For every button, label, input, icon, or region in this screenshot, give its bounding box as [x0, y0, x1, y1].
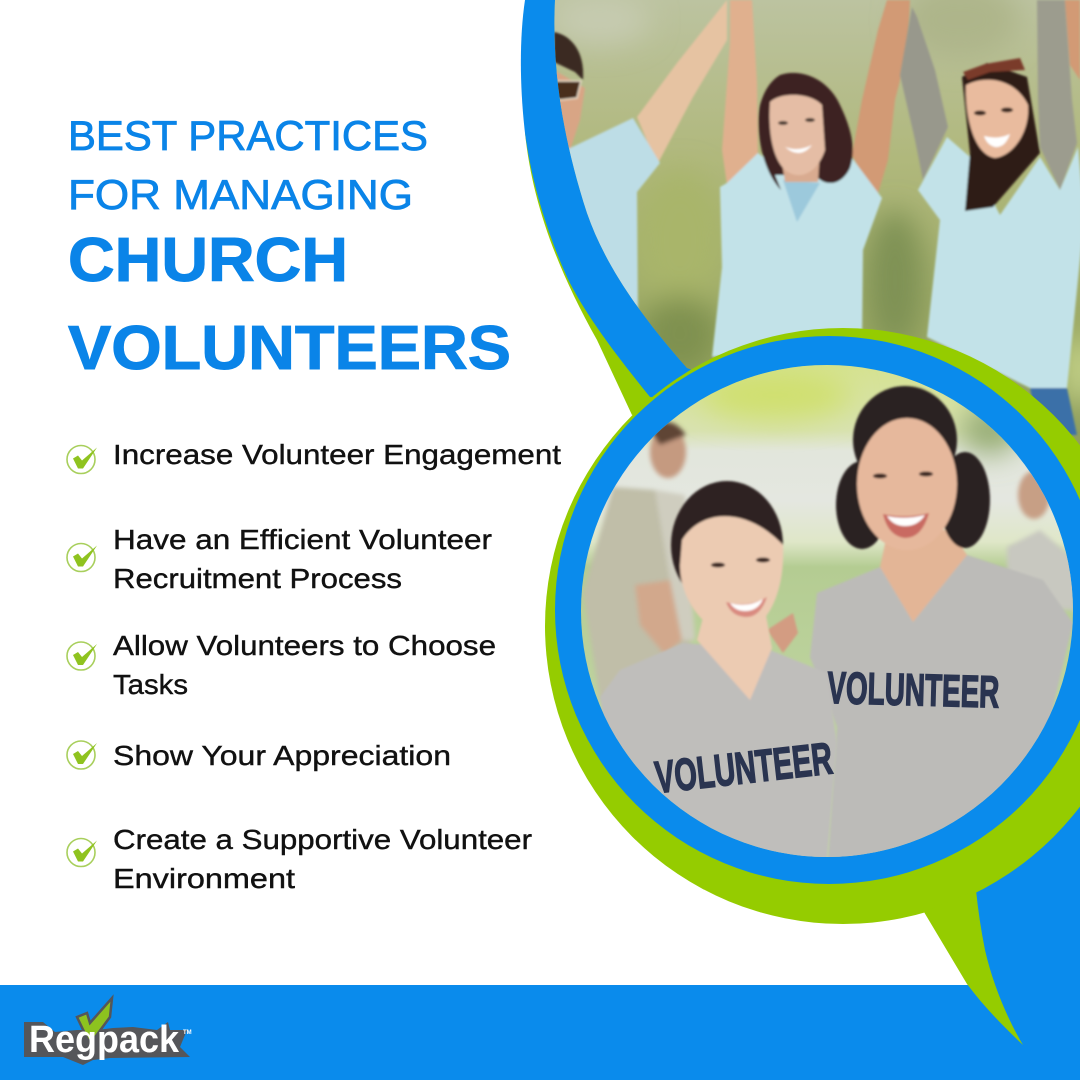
right volunteer	[810, 386, 1073, 860]
speech bubble: green ring and tail	[545, 328, 1080, 1045]
footer band	[0, 985, 1080, 1080]
logo: Regpack	[24, 998, 192, 1065]
hand on shoulder	[767, 613, 798, 653]
shirt lettering: VOLUNTEER	[652, 732, 835, 803]
title: FOR MANAGING	[68, 171, 413, 218]
woman on the right	[900, 0, 1080, 435]
woman in the centre	[712, 0, 910, 357]
green sliver of upper arc	[525, 133, 700, 415]
title: CHURCH	[68, 226, 348, 295]
left volunteer	[600, 481, 837, 860]
title: VOLUNTEERS	[68, 314, 511, 383]
item: supportive environment: Environment	[113, 863, 295, 894]
item: choose tasks: Allow Volunteers to Choose	[113, 630, 496, 661]
item: recruitment process: Have an Efficient Volunteer	[113, 524, 492, 555]
logo: Regpack: TM	[183, 1030, 192, 1036]
item: choose tasks	[67, 630, 496, 700]
item: supportive environment	[67, 824, 532, 894]
title	[68, 112, 511, 383]
logo: Regpack: Regpack	[29, 1019, 180, 1061]
blue upper arc	[521, 0, 700, 400]
title: BEST PRACTICES	[68, 112, 428, 159]
blue corner behind speech bubble	[976, 780, 1080, 1080]
photo: volunteers raising hands	[554, 0, 1080, 446]
item: choose tasks: Tasks	[113, 669, 188, 700]
item: appreciation: Show Your Appreciation	[113, 740, 451, 771]
background people	[583, 422, 1075, 700]
item: supportive environment: Create a Supportive Volunteer	[113, 824, 532, 855]
checklist	[67, 439, 561, 894]
item: recruitment process	[67, 524, 492, 594]
photo: two volunteers in grey shirts	[575, 360, 1080, 865]
man with sunglasses	[554, 0, 727, 320]
item: recruitment process: Recruitment Process	[113, 563, 402, 594]
speech bubble: blue ring	[555, 336, 1080, 884]
item: increase engagement: Increase Volunteer Engagement	[113, 439, 561, 470]
